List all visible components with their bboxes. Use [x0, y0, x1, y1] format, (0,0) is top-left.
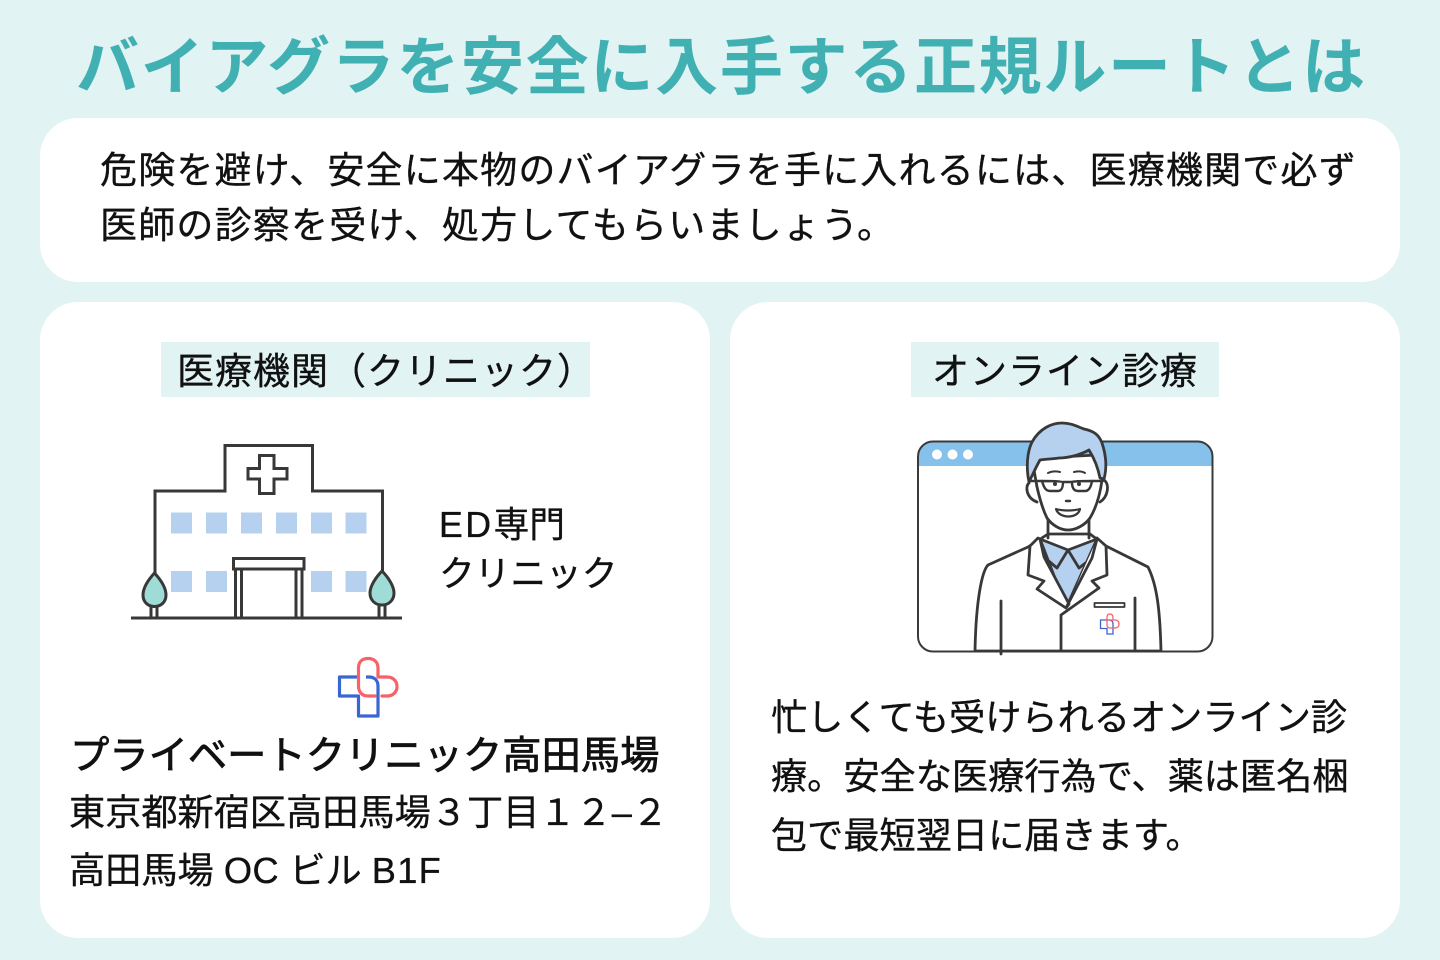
panel: clinic	[40, 302, 710, 938]
clinic heading	[161, 342, 590, 397]
online text	[771, 697, 1349, 856]
intro text: 医師の診察を受け、処方してもらいましょう。	[100, 205, 895, 246]
online text: 忙しくても受けられるオンライン診	[771, 697, 1347, 738]
panel: online	[730, 302, 1400, 938]
clinic label: クリニック	[439, 554, 617, 594]
icon: clinic logo	[338, 656, 399, 718]
doctor	[975, 423, 1161, 654]
clinic heading text: 医療機関（クリニック）	[177, 351, 595, 392]
online heading text: オンライン診療	[932, 351, 1198, 392]
panel: intro	[40, 118, 1400, 282]
title: バイアグラを安全に入手する正規ルートとは	[76, 17, 1367, 108]
intro text	[100, 150, 1357, 246]
online text: 療。安全な医療行為で、薬は匿名梱	[771, 756, 1349, 797]
intro text: 危険を避け、安全に本物のバイアグラを手に入れるには、医療機関で必ず	[100, 150, 1357, 191]
icon: doctor in browser window	[917, 422, 1214, 656]
online text: 包で最短翌日に届きます。	[771, 815, 1202, 856]
clinic name: プライベートクリニック高田馬場	[70, 734, 659, 778]
browser window	[918, 442, 1212, 652]
coat logo	[1100, 614, 1119, 634]
clinic address: 高田馬場 OC ビル B1F	[69, 850, 442, 891]
clinic label	[439, 505, 617, 594]
clinic address	[69, 792, 668, 891]
clinic label: ED専門	[439, 505, 565, 545]
clinic address: 東京都新宿区高田馬場３丁目１２–２	[69, 792, 668, 833]
online heading	[911, 342, 1219, 397]
icon: hospital building	[131, 444, 402, 620]
